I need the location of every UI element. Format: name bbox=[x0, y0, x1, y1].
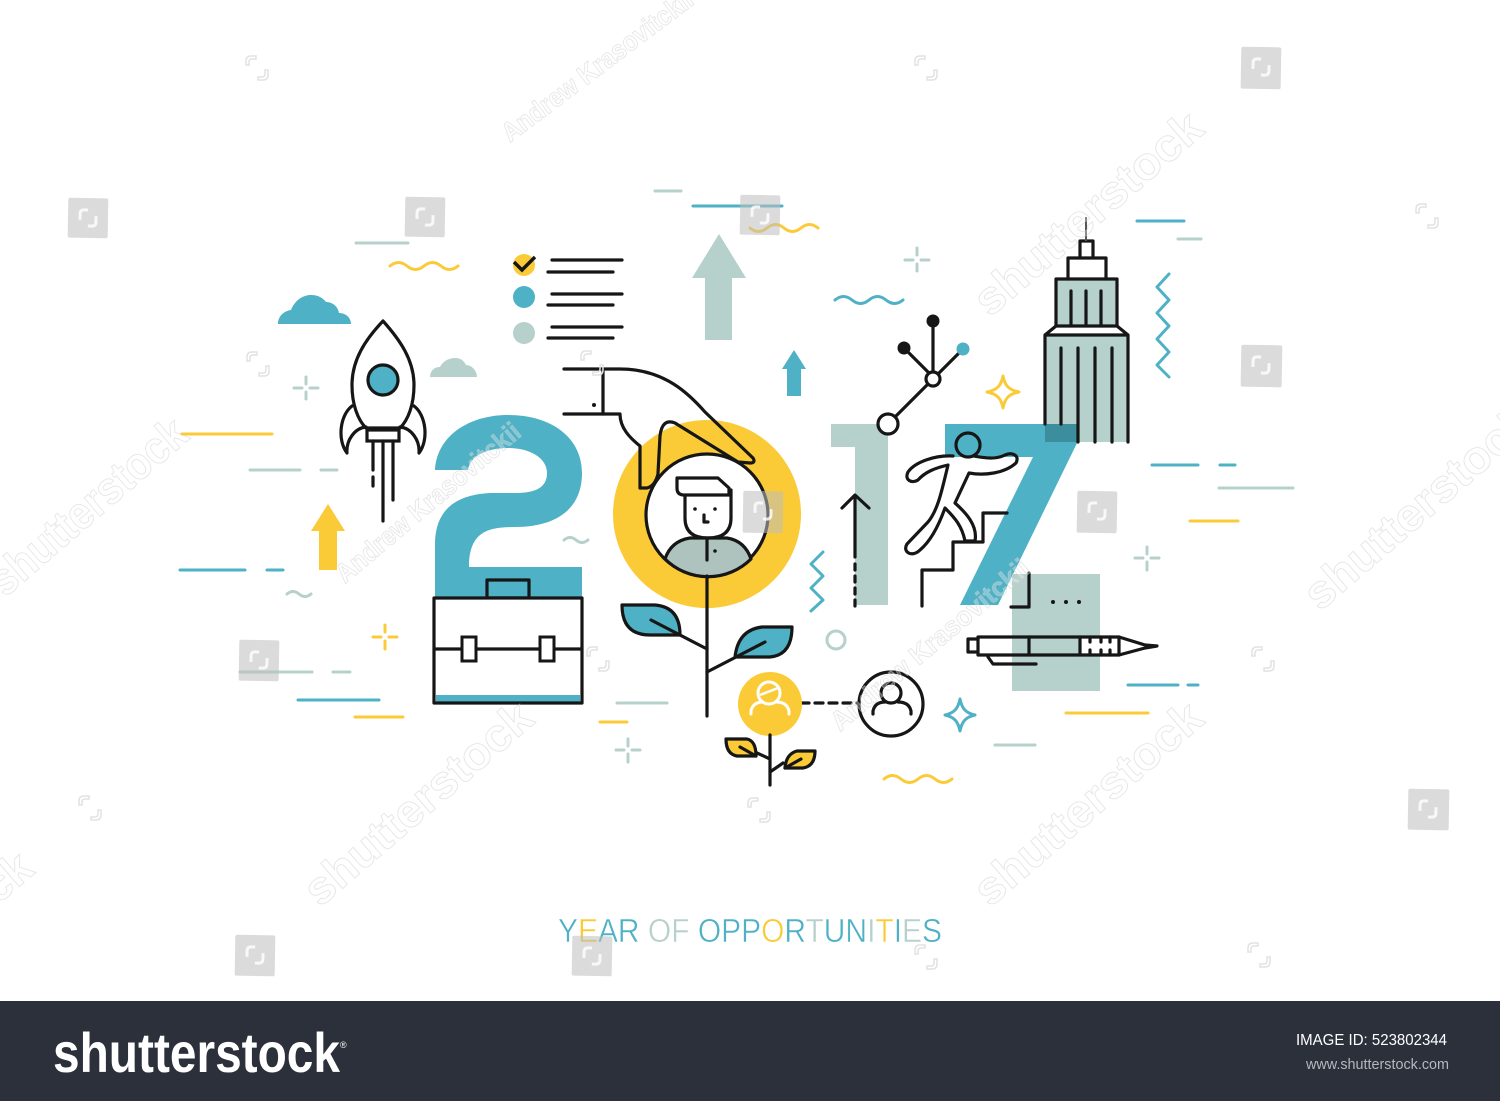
digit 1 bbox=[831, 424, 888, 605]
icon: plant with man portrait bbox=[622, 454, 792, 716]
watermark text: shutterstock bbox=[293, 690, 543, 916]
icon: briefcase bbox=[434, 580, 582, 703]
star: yellow bbox=[987, 376, 1019, 408]
digit 0: yellow ring bbox=[613, 420, 801, 608]
icon: pointing hand bbox=[564, 369, 754, 488]
icon: dashed growth arrow bbox=[842, 495, 869, 606]
zigzag accents bbox=[811, 274, 1169, 611]
man shoulders bbox=[665, 538, 751, 577]
star: teal bbox=[945, 699, 975, 731]
note page with pen bbox=[968, 573, 1157, 691]
site url: www.shutterstock.com bbox=[1305, 1057, 1449, 1073]
watermark squares bbox=[68, 47, 1449, 976]
man face and hair bbox=[677, 478, 731, 560]
left leaf bbox=[622, 605, 707, 649]
icon: branching nodes bbox=[878, 314, 970, 434]
digit 2 bbox=[435, 415, 582, 600]
small ring accent bbox=[827, 631, 845, 649]
person in outline circle bbox=[859, 672, 923, 736]
arrow: large sage up bbox=[692, 234, 746, 340]
arrow: yellow up bbox=[311, 504, 345, 570]
wavy accents bbox=[287, 224, 952, 782]
icon: rocket bbox=[341, 321, 425, 521]
small yellow plant bbox=[726, 735, 815, 785]
image id: IMAGE ID: 523802344 bbox=[1296, 1032, 1447, 1049]
icon: skyscraper bbox=[1045, 217, 1128, 442]
cloud: sage bbox=[430, 358, 477, 377]
right leaf bbox=[707, 627, 792, 672]
title: year of opportunities: YEAR OF OPPORTUNITIES bbox=[558, 912, 942, 949]
footer logo: shutterstock bbox=[53, 1021, 341, 1084]
watermark logo marks bbox=[79, 56, 1438, 969]
watermark text: shutterstock bbox=[963, 690, 1213, 916]
icon: checklist bbox=[513, 254, 622, 344]
icon: pen bbox=[968, 637, 1157, 664]
watermark text: shutterstock bbox=[963, 100, 1213, 326]
icon: running man on stairs bbox=[906, 433, 1017, 606]
registered mark: ® bbox=[340, 1040, 347, 1050]
person in yellow circle bbox=[738, 672, 802, 736]
sparkle plus marks bbox=[294, 248, 1159, 762]
horizontal accent lines bbox=[180, 191, 1293, 745]
cloud: teal bbox=[278, 295, 351, 324]
digit 7 bbox=[945, 424, 1078, 605]
connected people icons bbox=[726, 672, 923, 785]
footer bar bbox=[0, 1001, 1500, 1101]
watermark text: Andrew Krasovitckii bbox=[825, 553, 1035, 737]
watermark text: Andrew Krasovitckii bbox=[330, 416, 527, 589]
arrow: small teal up bbox=[782, 350, 806, 396]
